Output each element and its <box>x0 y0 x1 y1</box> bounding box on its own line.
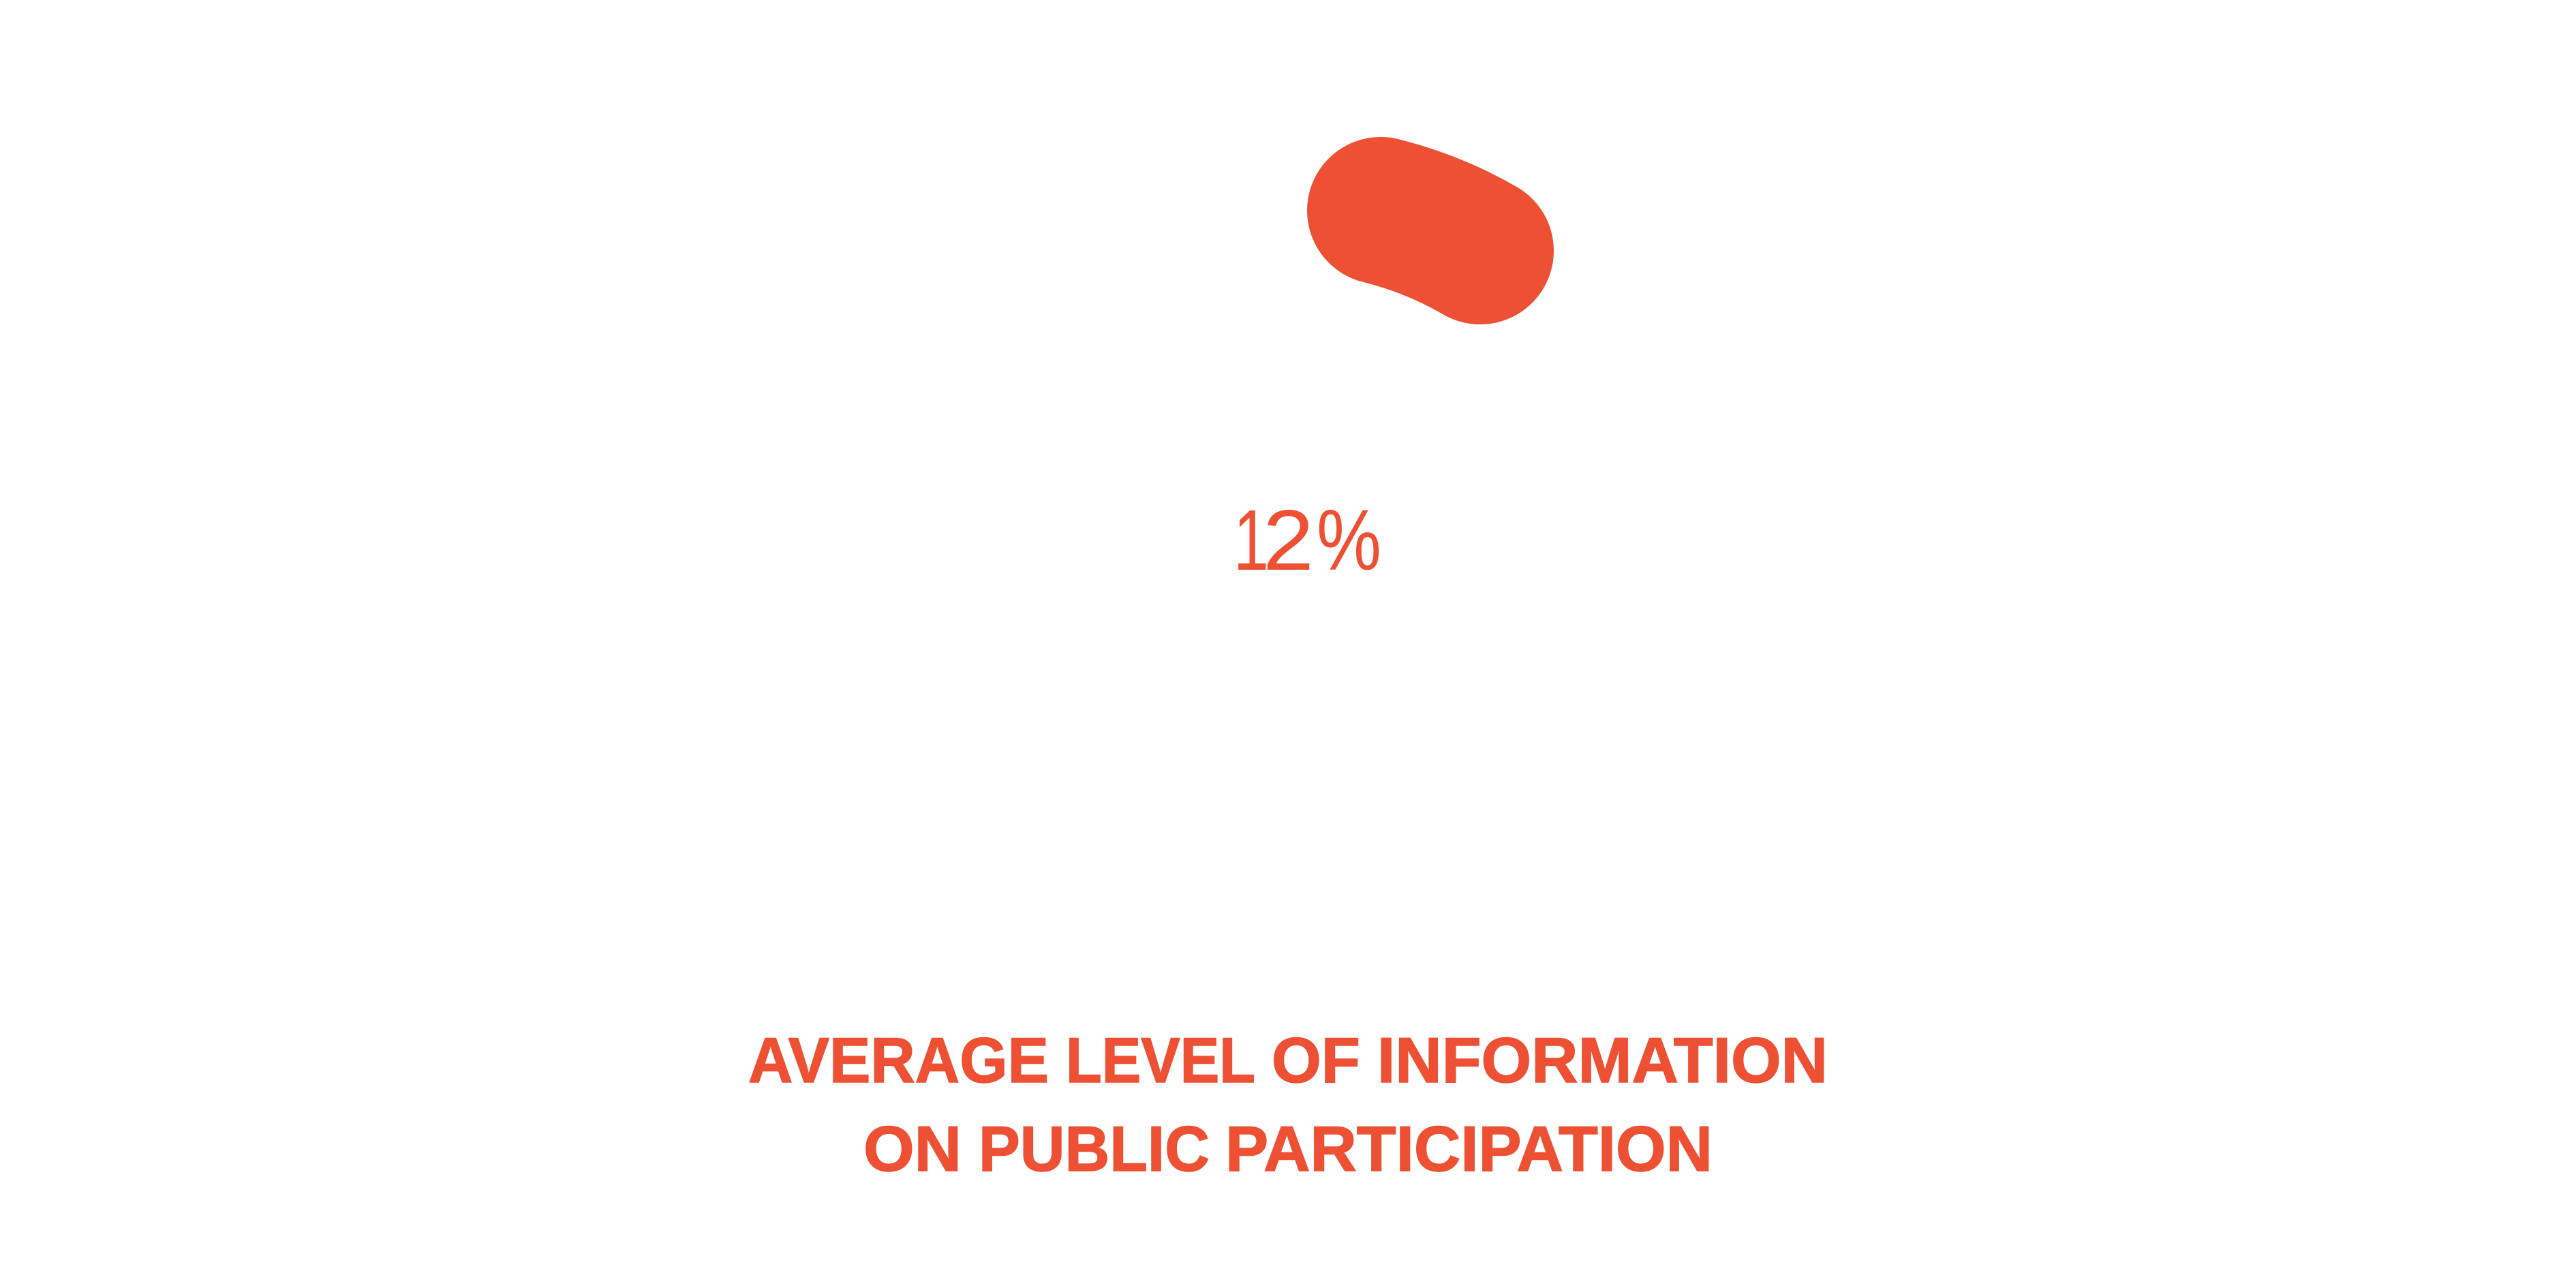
heading line 2: PUBLIC <box>979 1113 1210 1184</box>
percentage value <box>1233 492 1381 588</box>
gauge arc segment: 12% <box>1381 211 1480 251</box>
heading line 1 <box>748 1024 1828 1096</box>
percentage value: 2 <box>1263 492 1314 588</box>
heading line 1: LEVEL <box>1066 1024 1255 1096</box>
heading <box>748 1024 1828 1184</box>
percentage value: 1 <box>1233 492 1269 588</box>
heading line 2: PARTICIPATION <box>1225 1113 1713 1184</box>
heading line 1: INFORMATION <box>1377 1024 1828 1096</box>
heading line 1: AVERAGE <box>748 1024 1049 1096</box>
heading line 1: OF <box>1272 1024 1360 1096</box>
heading line 2 <box>863 1113 1713 1184</box>
percentage value: % <box>1317 492 1381 588</box>
heading line 2: ON <box>863 1113 962 1184</box>
